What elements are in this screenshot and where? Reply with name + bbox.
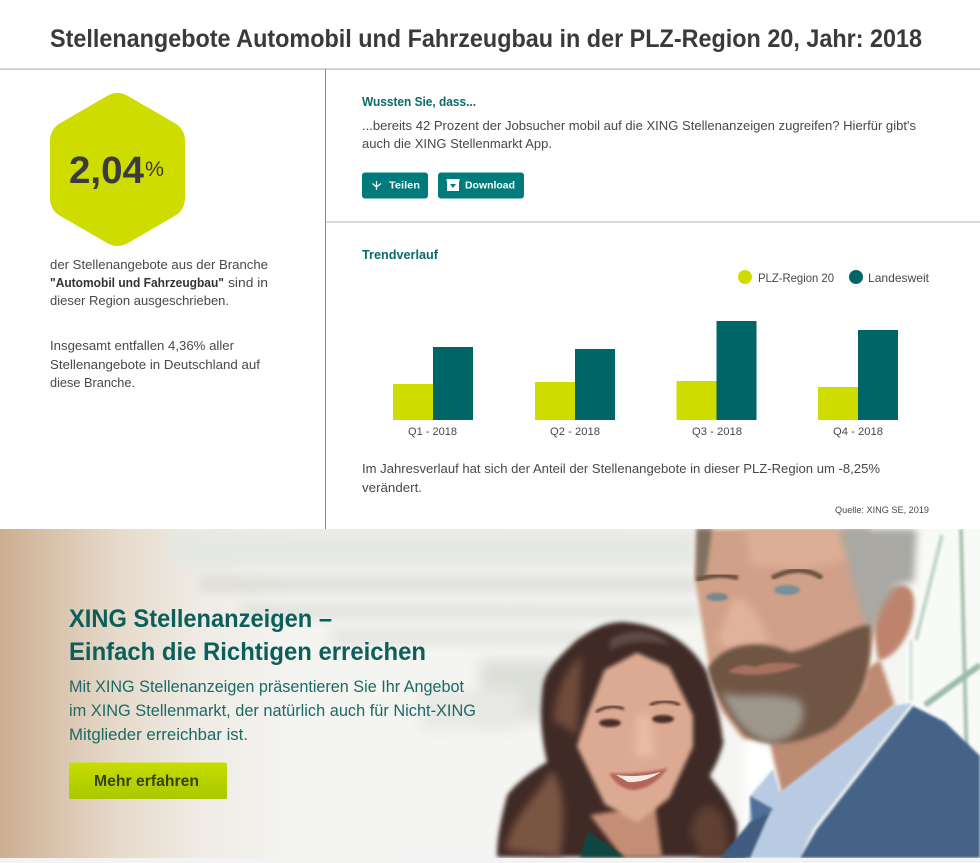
icon: hexagon with share value: % xyxy=(145,158,164,181)
bars: Q1: Q1 - 2018 xyxy=(408,426,457,438)
button: learn more xyxy=(69,762,227,799)
legend: PLZ-Region 20 xyxy=(758,271,834,285)
bars: Q4: Q4 - 2018 xyxy=(833,426,883,438)
woman xyxy=(497,622,738,857)
text block: trend summary: verändert. xyxy=(362,480,422,495)
photo: two people xyxy=(0,529,980,858)
bars: Q4 xyxy=(818,330,898,438)
button: learn more: Mehr erfahren xyxy=(94,773,199,790)
man neck xyxy=(768,660,895,795)
text block: regional share: "Automobil und Fahrzeugbau" xyxy=(50,276,224,290)
icon: hexagon with share value: 2,04 xyxy=(69,150,144,192)
banner heading: Einfach die Richtigen erreichen xyxy=(69,638,426,666)
text block: regional share: sind in xyxy=(228,275,268,290)
button: download: Download xyxy=(465,180,515,192)
text block: national share: Insgesamt entfallen 4,36% aller xyxy=(50,338,235,353)
bars: Q3 xyxy=(676,321,756,438)
man hair xyxy=(840,529,917,640)
button: download xyxy=(438,172,524,198)
banner text: Mitglieder erreichbar ist. xyxy=(69,726,248,744)
text block: did you know xyxy=(362,118,916,151)
banner text xyxy=(69,678,476,744)
bars: Q1 xyxy=(393,347,473,438)
heading: trend: Trendverlauf xyxy=(362,248,439,262)
text block: national share xyxy=(50,338,260,390)
text block: national share: diese Branche. xyxy=(50,375,135,390)
bar chart xyxy=(393,321,898,438)
woman neck xyxy=(590,805,662,857)
text block: national share: Stellenangebote in Deutschland auf xyxy=(50,357,260,372)
man shirt xyxy=(747,703,912,858)
button: share xyxy=(362,172,428,198)
icon: hexagon with share value xyxy=(69,113,165,226)
icon: download xyxy=(446,179,460,191)
man face xyxy=(695,529,880,742)
man suit xyxy=(800,706,980,858)
woman hair xyxy=(497,622,738,857)
button: share: Teilen xyxy=(389,180,420,192)
banner heading xyxy=(69,605,426,666)
panel: key figure xyxy=(50,113,268,390)
legend xyxy=(738,270,930,285)
banner heading: XING Stellenanzeigen – xyxy=(69,605,332,633)
banner text: Mit XING Stellenanzeigen präsentieren Sie Ihr Angebot xyxy=(69,678,464,696)
text block: trend summary: Im Jahresverlauf hat sich der Anteil der Stellenangebote in dieser PLZ-Region um -8,25% xyxy=(362,461,880,476)
bars: Q2 xyxy=(535,349,615,438)
man beard xyxy=(708,625,870,743)
panel: did you know xyxy=(362,95,916,198)
text block: did you know: auch die XING Stellenmarkt App. xyxy=(362,136,552,151)
text block: regional share: der Stellenangebote aus der Branche xyxy=(50,257,268,272)
woman face xyxy=(580,656,690,819)
banner text: im XING Stellenmarkt, der natürlich auch für Nicht-XING xyxy=(69,702,476,720)
legend: Landesweit xyxy=(868,271,930,285)
man ear xyxy=(870,585,914,660)
man eyes and brows xyxy=(697,575,738,580)
panel: trend xyxy=(362,248,930,516)
man xyxy=(695,529,980,858)
text block: regional share xyxy=(50,257,268,308)
title: Stellenangebote Automobil und Fahrzeugbau in der PLZ-Region 20, Jahr: 2018 xyxy=(50,25,922,53)
banner xyxy=(0,529,980,863)
icon: share xyxy=(372,181,381,190)
text block: trend summary xyxy=(362,461,880,495)
bars: Q2: Q2 - 2018 xyxy=(550,426,600,438)
man tie and collar xyxy=(722,796,773,858)
text block: regional share: dieser Region ausgeschrieben. xyxy=(50,293,229,308)
heading: did you know: Wussten Sie, dass... xyxy=(362,95,476,109)
text block: did you know: ...bereits 42 Prozent der Jobsucher mobil auf die XING Stellenanzeigen zugreifen? Hierfür gibt's xyxy=(362,118,916,133)
source: Quelle: XING SE, 2019 xyxy=(835,505,929,516)
bars: Q3: Q3 - 2018 xyxy=(692,426,742,438)
